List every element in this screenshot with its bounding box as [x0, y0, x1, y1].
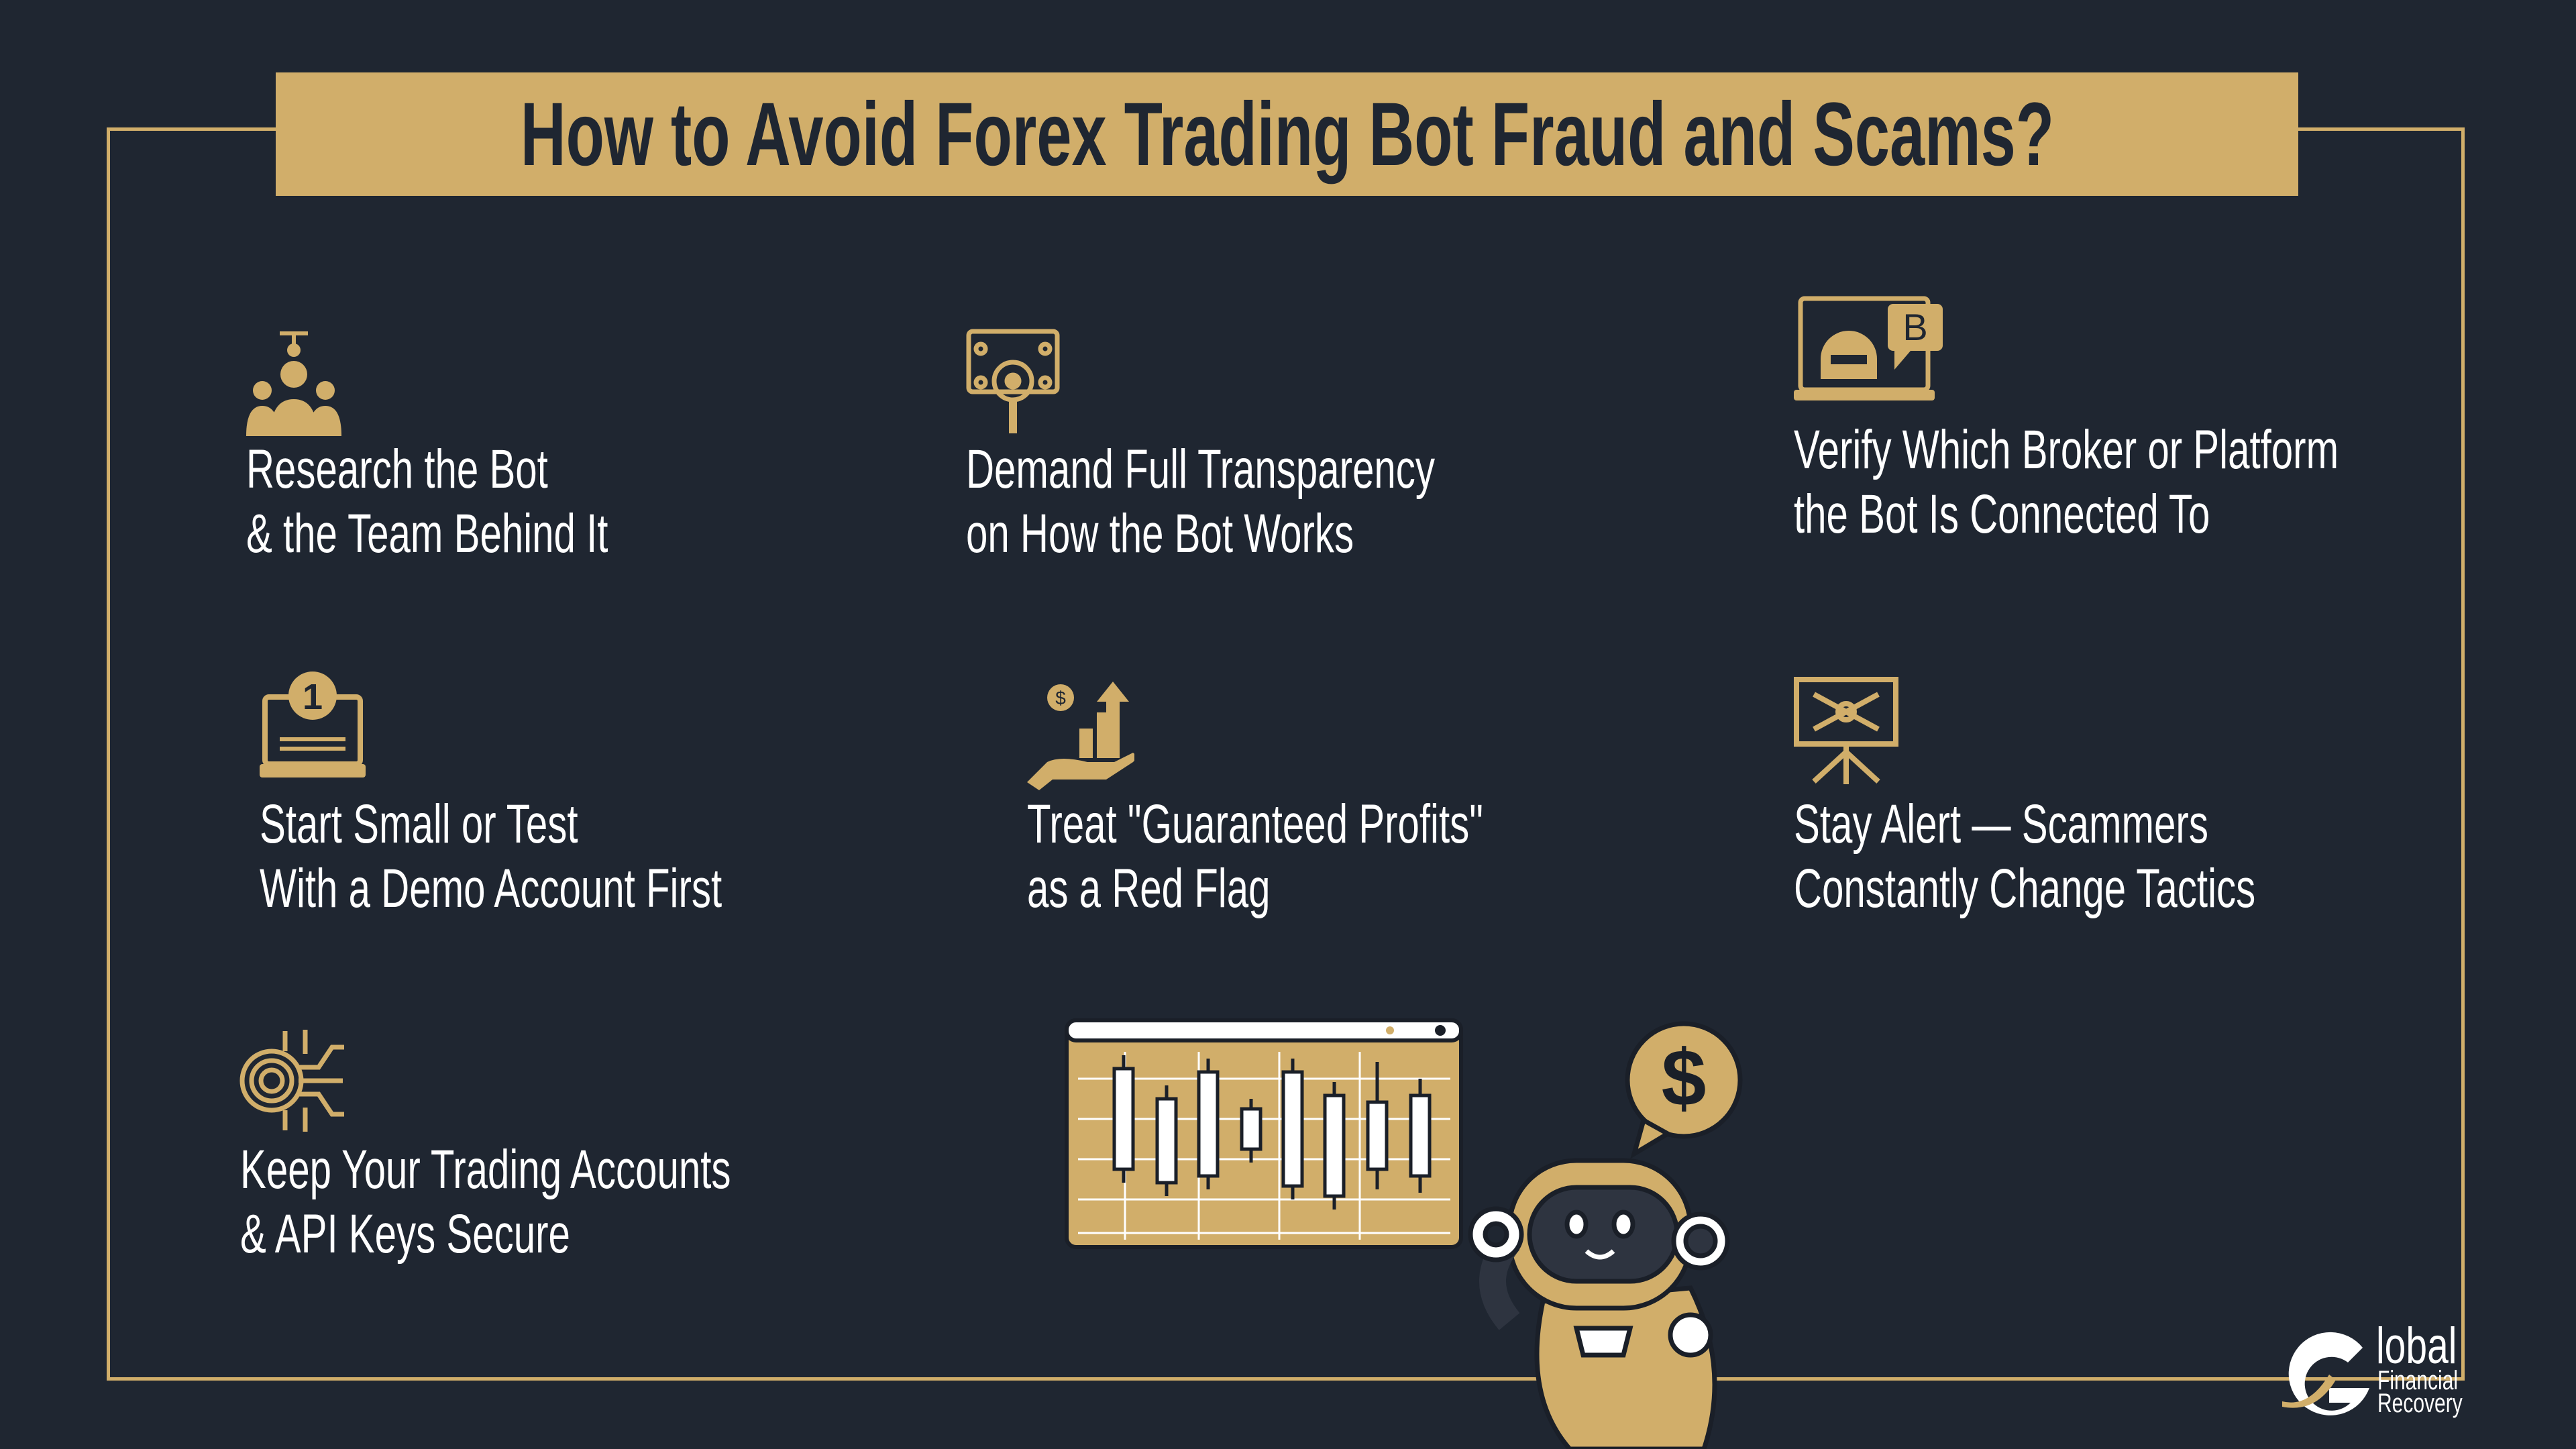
text: demo: With a Demo Account First — [260, 858, 722, 919]
text: research: & the Team Behind It — [246, 503, 608, 564]
icon: research team — [246, 331, 341, 436]
text: broker: Verify Which Broker or Platform — [1794, 419, 2339, 480]
text: demo — [260, 794, 722, 919]
chart: candlestick screen — [1065, 1018, 1463, 1249]
title banner: How to Avoid Forex Trading Bot Fraud and Scams? — [520, 85, 2054, 184]
title banner — [276, 72, 2298, 196]
robot with dollar bubble: $ — [1662, 1033, 1706, 1123]
icon: broker laptop — [1794, 297, 1943, 400]
logo: Global Financial Recovery: Recovery — [2377, 1389, 2463, 1418]
text: secure: Keep Your Trading Accounts — [240, 1139, 731, 1200]
icon: hand with profits — [1027, 682, 1134, 790]
text: transparency: on How the Bot Works — [966, 503, 1354, 564]
text: secure — [240, 1139, 731, 1265]
icon: presentation board — [1794, 677, 1898, 784]
text: stay alert — [1794, 794, 2255, 919]
text: research: Research the Bot — [246, 439, 548, 500]
text: secure: & API Keys Secure — [240, 1203, 570, 1265]
text: demo: Start Small or Test — [260, 794, 578, 855]
text: stay alert: Stay Alert — Scammers — [1794, 794, 2208, 855]
text: stay alert: Constantly Change Tactics — [1794, 858, 2255, 919]
icon: hand with profits: $ — [1055, 688, 1066, 708]
icon: demo account laptop — [260, 672, 366, 777]
icon: demo account laptop: 1 — [303, 677, 323, 717]
icon: transparency magnifier — [966, 329, 1060, 433]
icon: broker laptop: B — [1902, 306, 1928, 348]
logo: Global Financial Recovery: lobal — [2376, 1318, 2457, 1375]
text: broker — [1794, 419, 2339, 545]
text: guaranteed profits: Treat "Guaranteed Profits" — [1027, 794, 1483, 855]
robot with dollar bubble — [1468, 1021, 1743, 1449]
text: research — [246, 439, 608, 564]
logo: Global Financial Recovery: Financial — [2377, 1366, 2458, 1395]
text: transparency — [966, 439, 1435, 564]
text: transparency: Demand Full Transparency — [966, 439, 1435, 500]
text: guaranteed profits — [1027, 794, 1483, 919]
text: guaranteed profits: as a Red Flag — [1027, 858, 1270, 919]
logo: Global Financial Recovery — [2282, 1318, 2463, 1418]
icon: fingerprint circuit — [240, 1030, 344, 1132]
text: broker: the Bot Is Connected To — [1794, 484, 2210, 545]
